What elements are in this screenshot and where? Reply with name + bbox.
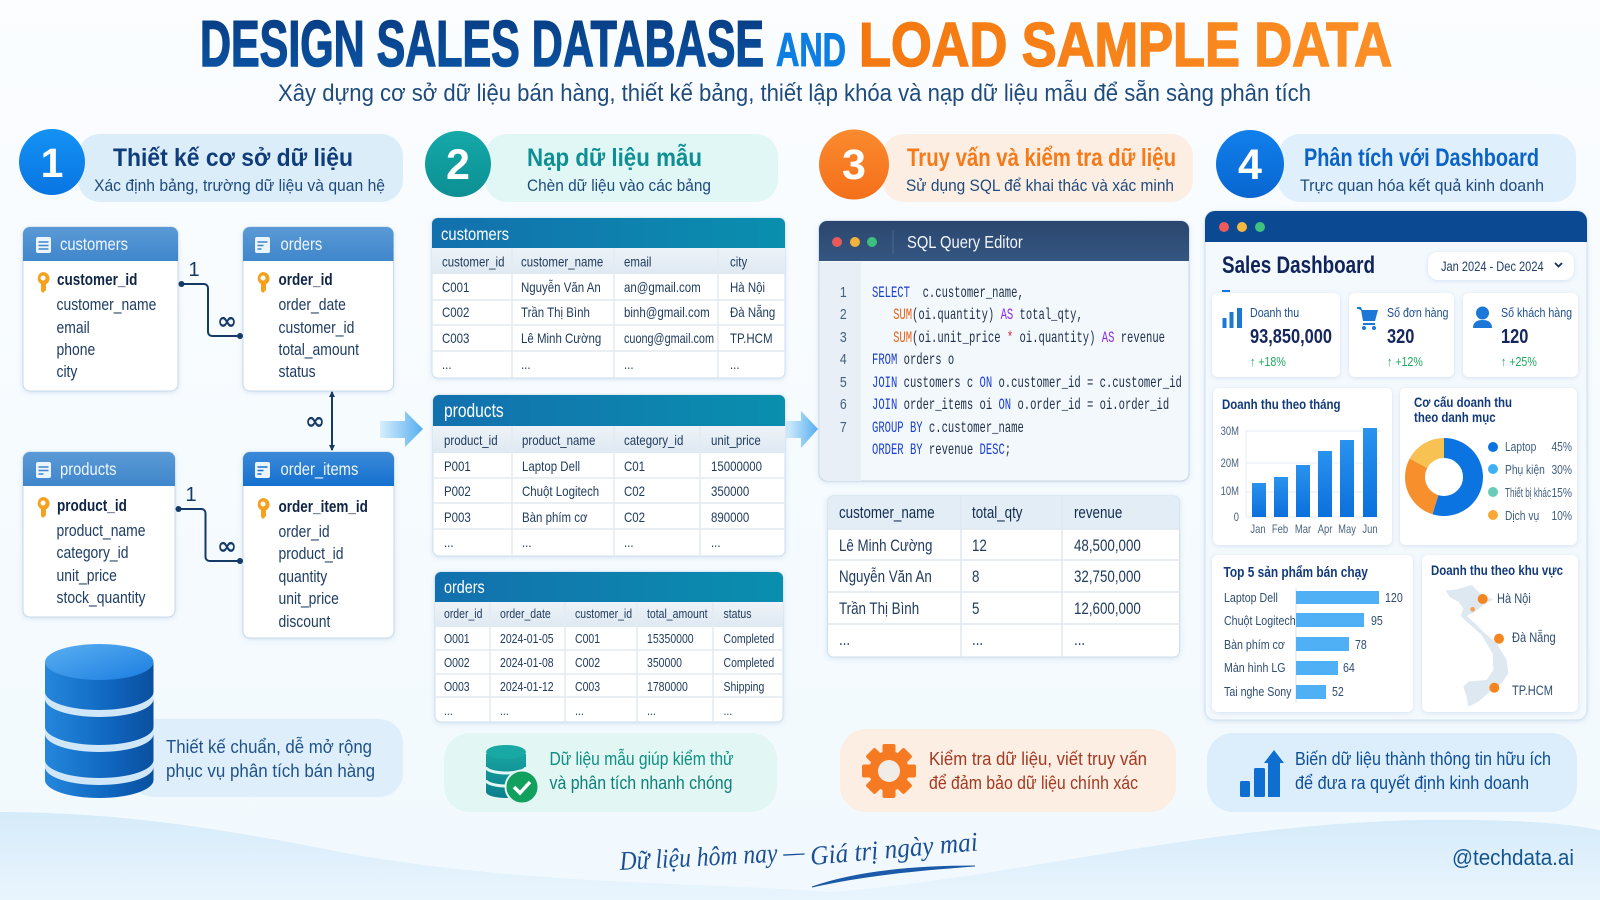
data table: orders: O001 <box>444 632 470 646</box>
data table: orders: Shipping <box>724 680 764 694</box>
data table: customers: C002 <box>442 304 469 320</box>
step 3 header: Truy vấn và kiểm tra dữ liệu <box>907 144 1176 172</box>
data table: products: 890000 <box>711 509 749 525</box>
data table: products: C01 <box>624 458 645 474</box>
data table: customers: C001 <box>442 279 469 295</box>
er table: orders: total_amount <box>279 341 360 359</box>
panel: SQL query editor: SQL Query Editor <box>907 233 1023 252</box>
query result table: ... <box>839 632 850 649</box>
step 2 header <box>425 131 778 202</box>
data table: orders: 2024-01-05 <box>500 632 554 646</box>
chart: revenue by category donut: theo danh mục <box>1414 409 1496 425</box>
connector: orders to order_items: ∞ <box>305 407 325 435</box>
KPI: orders: 320 <box>1387 324 1414 347</box>
KPI: revenue: ↑ +18% <box>1250 354 1286 369</box>
data table: orders: ... <box>724 704 732 718</box>
callout: design note: phục vụ phân tích bán hàng <box>166 760 375 781</box>
data table: customers: Đà Nẵng <box>730 304 775 320</box>
chart: top 5 products: Bàn phím cơ <box>1224 637 1285 652</box>
data table: products: P003 <box>444 509 471 525</box>
data table: products: product_id <box>444 432 498 448</box>
chart: top 5 products: 95 <box>1371 613 1383 628</box>
arrow: design to load <box>380 411 423 447</box>
data table: products: ... <box>444 534 454 550</box>
er table: products: category_id <box>57 544 129 562</box>
icon: gear <box>862 744 916 798</box>
er table: products: product_id <box>57 497 127 515</box>
data table: customers: TP.HCM <box>730 330 773 346</box>
chart: top 5 products: 52 <box>1332 684 1344 699</box>
SQL code: SUM(oi.quantity) AS total_qty, <box>893 306 1083 324</box>
title: DESIGN SALES DATABASE <box>200 7 764 80</box>
er table: order_items: unit_price <box>279 590 339 608</box>
er table: customers: phone <box>57 341 95 359</box>
data table: orders: 2024-01-12 <box>500 680 554 694</box>
chart: revenue by category donut <box>1400 388 1577 545</box>
chart: revenue by region map: Đà Nẵng <box>1512 629 1556 645</box>
callout: sample data note: Dữ liệu mẫu giúp kiểm thử <box>550 748 734 769</box>
chart: revenue by region map: TP.HCM <box>1512 683 1553 698</box>
connector: customers to orders: ∞ <box>217 307 237 335</box>
icon: database with check <box>486 745 538 804</box>
er table: products: product_name <box>57 522 146 540</box>
data table: customers: Trần Thị Bình <box>521 304 590 320</box>
query result table: revenue <box>1074 505 1122 522</box>
title: LOAD SAMPLE DATA <box>859 11 1392 80</box>
panel: sales dashboard <box>1205 211 1587 720</box>
query result table: ... <box>1074 632 1085 649</box>
data table: orders: ... <box>575 704 584 718</box>
query result table: 48,500,000 <box>1074 538 1141 555</box>
data table: products: C02 <box>624 509 645 525</box>
step 3 header: Sử dụng SQL để khai thác và xác minh <box>906 176 1174 195</box>
data table: products: Bàn phím cơ <box>522 509 588 525</box>
line numbers <box>840 284 847 435</box>
query result table: 8 <box>972 569 979 586</box>
SQL code: GROUP BY c.customer_name <box>872 419 1024 437</box>
chart: revenue by category donut: 10% <box>1551 510 1572 523</box>
er table: products: stock_quantity <box>57 589 146 607</box>
data table: orders <box>435 572 783 722</box>
data table: products: 15000000 <box>711 458 762 474</box>
data table: customers: an@gmail.com <box>624 279 701 295</box>
data table: customers: ... <box>442 356 452 372</box>
connector: products to order_items <box>176 484 243 564</box>
callout: design note <box>130 719 403 797</box>
er table: customers <box>23 227 178 391</box>
er table: products: products <box>60 460 117 479</box>
data table: orders: status <box>724 607 752 621</box>
data table: orders: ... <box>647 704 656 718</box>
er table: customers: email <box>57 319 90 337</box>
step 1 header: Xác định bảng, trường dữ liệu và quan hệ <box>94 176 385 195</box>
KPI: revenue: Doanh thu <box>1250 305 1299 320</box>
chart: revenue by category donut: Dịch vụ <box>1505 510 1539 523</box>
SQL code: JOIN customers c ON o.customer_id = c.customer_id <box>872 374 1182 392</box>
chart: monthly revenue bars: 20M <box>1221 457 1239 470</box>
data table: products: products <box>444 400 504 421</box>
chart: top 5 products: Màn hình LG <box>1224 660 1286 675</box>
chart: revenue by region map: Doanh thu theo khu vực <box>1431 562 1563 578</box>
step 4 header: Trực quan hóa kết quả kinh doanh <box>1300 176 1544 195</box>
data table: orders: order_date <box>500 607 551 621</box>
data table: customers: customers <box>441 225 509 244</box>
SQL code: SUM(oi.unit_price * oi.quantity) AS revenue <box>893 329 1165 347</box>
title: AND <box>776 23 846 76</box>
KPI: customers: Số khách hàng <box>1501 305 1572 320</box>
er table: order_items: order_item_id <box>279 498 368 516</box>
data table: customers: customer_name <box>521 253 603 270</box>
data table: orders: O003 <box>444 680 470 694</box>
connector: products to order_items: ∞ <box>217 532 237 560</box>
query result table <box>828 496 1180 657</box>
query result table: Nguyễn Văn An <box>839 568 932 586</box>
query result table: customer_name <box>839 505 935 522</box>
chart: monthly revenue bars: Feb <box>1272 523 1288 536</box>
query result table: Lê Minh Cường <box>839 538 932 555</box>
er table: orders: order_date <box>279 296 346 314</box>
step 4 header: Phân tích với Dashboard <box>1304 144 1539 172</box>
connector: orders to order_items <box>305 391 335 451</box>
data table: products: Chuột Logitech <box>522 483 599 499</box>
SQL code: JOIN order_items oi ON o.order_id = oi.order_id <box>872 396 1169 414</box>
step 4 header: 4 <box>1238 141 1262 189</box>
data table: orders: total_amount <box>647 607 708 621</box>
chart: monthly revenue bars: Doanh thu theo tháng <box>1222 396 1341 412</box>
chart: top 5 products <box>1212 555 1413 712</box>
data table: orders: C001 <box>575 632 600 646</box>
data table: customers <box>432 218 785 378</box>
connector: customers to orders <box>178 259 243 339</box>
er table: orders <box>243 227 394 391</box>
data table: customers: Lê Minh Cường <box>521 330 601 346</box>
chart: monthly revenue bars: Mar <box>1295 523 1312 536</box>
step 2 header: Chèn dữ liệu vào các bảng <box>527 176 711 195</box>
KPI: customers: ↑ +25% <box>1501 354 1537 369</box>
query result table: 12,600,000 <box>1074 601 1141 618</box>
panel: SQL query editor <box>819 221 1189 481</box>
data table: customers: binh@gmail.com <box>624 304 710 320</box>
callout: sample data note <box>444 733 777 812</box>
chart: monthly revenue bars: Jun <box>1362 523 1378 536</box>
data table: orders: order_id <box>444 607 482 621</box>
chart: revenue by region map <box>1422 555 1578 712</box>
callout: design note: Thiết kế chuẩn, dễ mở rộng <box>166 736 372 757</box>
data table: orders: customer_id <box>575 607 632 621</box>
data table: customers: city <box>730 253 748 270</box>
query result table: total_qty <box>972 505 1023 522</box>
callout: query note <box>840 729 1176 812</box>
er table: customers: customer_name <box>57 296 156 314</box>
data table: products: product_name <box>522 432 595 448</box>
chart: revenue by category donut: Thiết bị khác <box>1505 486 1551 500</box>
query result table: 12 <box>972 538 987 555</box>
data table: orders: 15350000 <box>647 632 694 646</box>
connector: products to order_items: 1 <box>185 484 197 506</box>
data table: customers: Nguyễn Văn An <box>521 279 601 295</box>
step 3 header: 3 <box>842 141 866 189</box>
data table: orders: ... <box>500 704 509 718</box>
step 1 header <box>19 129 403 202</box>
step 3 header <box>819 130 1193 202</box>
er table: order_items: order_id <box>279 523 330 541</box>
chart: top 5 products: 78 <box>1355 637 1367 652</box>
er table: order_items <box>243 452 394 638</box>
data table: products: C02 <box>624 483 645 499</box>
callout: sample data note: và phân tích nhanh chóng <box>550 773 732 793</box>
footer slogan: Giá trị ngày mai <box>809 826 979 871</box>
er table: orders: orders <box>281 235 322 254</box>
data table: orders: 2024-01-08 <box>500 656 554 670</box>
data table: products <box>433 395 785 556</box>
chart: top 5 products: Chuột Logitech <box>1224 613 1296 628</box>
KPI: orders <box>1349 293 1454 377</box>
callout: dashboard note <box>1207 733 1577 812</box>
data table: orders: C002 <box>575 656 600 670</box>
data table: products: unit_price <box>711 432 761 448</box>
er table: customers: customer_id <box>57 271 137 289</box>
query result table: 32,750,000 <box>1074 569 1141 586</box>
chart: revenue by category donut: Laptop <box>1505 441 1536 454</box>
ER diagram <box>23 227 394 638</box>
callout: dashboard note: Biến dữ liệu thành thông tin hữu ích <box>1295 749 1551 769</box>
arrow: load to query <box>786 411 818 448</box>
data table: orders: 350000 <box>647 656 682 670</box>
footer wave background <box>0 812 1600 900</box>
er table: customers: city <box>57 363 78 381</box>
step 1 header: Thiết kế cơ sở dữ liệu <box>113 144 353 172</box>
subtitle: Xây dựng cơ sở dữ liệu bán hàng, thiết kế bảng, thiết lập khóa và nạp dữ liệu mẫu để sẵn sàng phân tích <box>278 79 1311 107</box>
data table: customers: ... <box>730 356 740 372</box>
line numbers: 6 <box>840 396 847 412</box>
data table: products: category_id <box>624 432 683 448</box>
data table: orders: 1780000 <box>647 680 688 694</box>
panel: sales dashboard: Sales Dashboard <box>1222 252 1375 279</box>
SQL code <box>872 284 1182 459</box>
query result table: ... <box>972 632 983 649</box>
KPI: revenue <box>1212 293 1340 377</box>
chart: top 5 products: Tai nghe Sony <box>1224 684 1292 699</box>
KPI: orders: Số đơn hàng <box>1387 305 1448 320</box>
er table: products <box>23 452 175 617</box>
KPI: customers <box>1463 293 1578 377</box>
connector: customers to orders: 1 <box>188 259 200 281</box>
line numbers: 5 <box>840 374 847 390</box>
data table: customers: customer_id <box>442 253 505 270</box>
data table: orders: orders <box>444 579 485 597</box>
SQL code: SELECT c.customer_name, <box>872 284 1024 302</box>
data table: orders: Completed <box>724 656 774 670</box>
chart: revenue by category donut: 15% <box>1551 487 1572 500</box>
er table: products: unit_price <box>57 567 117 585</box>
line numbers: 7 <box>840 419 847 435</box>
footer slogan <box>618 826 979 887</box>
data table: products: ... <box>624 534 634 550</box>
chart: monthly revenue bars <box>1213 388 1392 545</box>
callout: dashboard note: để đưa ra quyết định kinh doanh <box>1295 773 1529 793</box>
chart: revenue by region map: Hà Nội <box>1497 591 1531 606</box>
data table: products: P001 <box>444 458 471 474</box>
data table: orders: Completed <box>724 632 774 646</box>
callout: query note: Kiểm tra dữ liệu, viết truy vấn <box>929 749 1147 769</box>
line numbers: 3 <box>840 329 847 345</box>
chart: monthly revenue bars: 10M <box>1221 485 1239 498</box>
data table: customers: C003 <box>442 330 469 346</box>
icon: rising bars <box>1240 750 1284 797</box>
chart: monthly revenue bars: 30M <box>1221 425 1239 438</box>
data table: products: ... <box>522 534 532 550</box>
data table: products: 350000 <box>711 483 749 499</box>
chart: monthly revenue bars: Jan <box>1250 523 1266 536</box>
chart: monthly revenue bars: Apr <box>1318 523 1333 536</box>
er table: customers: customers <box>60 235 128 254</box>
data table: products: ... <box>711 534 721 550</box>
icon: database cylinder <box>45 644 154 798</box>
data table: customers: ... <box>521 356 531 372</box>
query result table: 5 <box>972 601 979 618</box>
step 2 header: Nạp dữ liệu mẫu <box>527 142 702 172</box>
data table: orders: ... <box>444 704 453 718</box>
footer handle: @techdata.ai <box>1452 845 1574 870</box>
chart: top 5 products: 120 <box>1385 590 1403 605</box>
er table: order_items: quantity <box>279 568 327 586</box>
line numbers: 2 <box>840 306 847 322</box>
er table: orders: customer_id <box>279 319 354 337</box>
chart: top 5 products: 64 <box>1343 660 1355 675</box>
SQL code: FROM orders o <box>872 351 954 369</box>
data table: customers: ... <box>624 356 634 372</box>
step 4 header <box>1216 130 1576 202</box>
chart: revenue by category donut: Cơ cấu doanh thu <box>1414 394 1512 410</box>
chart: revenue by category donut: 45% <box>1551 441 1572 454</box>
date range selector <box>1428 252 1574 280</box>
query result table: Trần Thị Bình <box>839 601 919 618</box>
data table: products: Laptop Dell <box>522 458 580 474</box>
callout: query note: để đảm bảo dữ liệu chính xác <box>929 773 1138 793</box>
data table: orders: O002 <box>444 656 470 670</box>
data table: products: P002 <box>444 483 471 499</box>
chart: monthly revenue bars: 0 <box>1234 511 1239 524</box>
data table: orders: C003 <box>575 680 600 694</box>
chart: monthly revenue bars: May <box>1338 523 1357 536</box>
er table: order_items: product_id <box>279 545 344 563</box>
chart: revenue by category donut: Phụ kiện <box>1505 464 1545 477</box>
er table: orders: status <box>279 363 316 381</box>
chart: revenue by category donut: 30% <box>1551 464 1572 477</box>
KPI: orders: ↑ +12% <box>1387 354 1423 369</box>
KPI: customers: 120 <box>1501 324 1528 347</box>
step 1 header: 1 <box>41 140 63 186</box>
data table: customers: email <box>624 253 651 270</box>
data table: customers: Hà Nội <box>730 279 765 295</box>
footer slogan: Dữ liệu hôm nay — <box>618 836 806 876</box>
line numbers: 4 <box>840 351 847 367</box>
step 2 header: 2 <box>446 141 470 189</box>
er table: orders: order_id <box>279 271 333 289</box>
KPI: revenue: 93,850,000 <box>1250 324 1332 347</box>
date range selector: Jan 2024 - Dec 2024 <box>1441 259 1544 274</box>
er table: order_items: discount <box>279 613 331 631</box>
chart: top 5 products: Top 5 sản phẩm bán chạy <box>1223 564 1368 580</box>
er table: order_items: order_items <box>281 460 358 479</box>
SQL code: ORDER BY revenue DESC; <box>872 441 1011 459</box>
data table: customers: cuong@gmail.com <box>624 330 714 346</box>
line numbers: 1 <box>840 284 847 300</box>
chart: top 5 products: Laptop Dell <box>1224 590 1278 605</box>
